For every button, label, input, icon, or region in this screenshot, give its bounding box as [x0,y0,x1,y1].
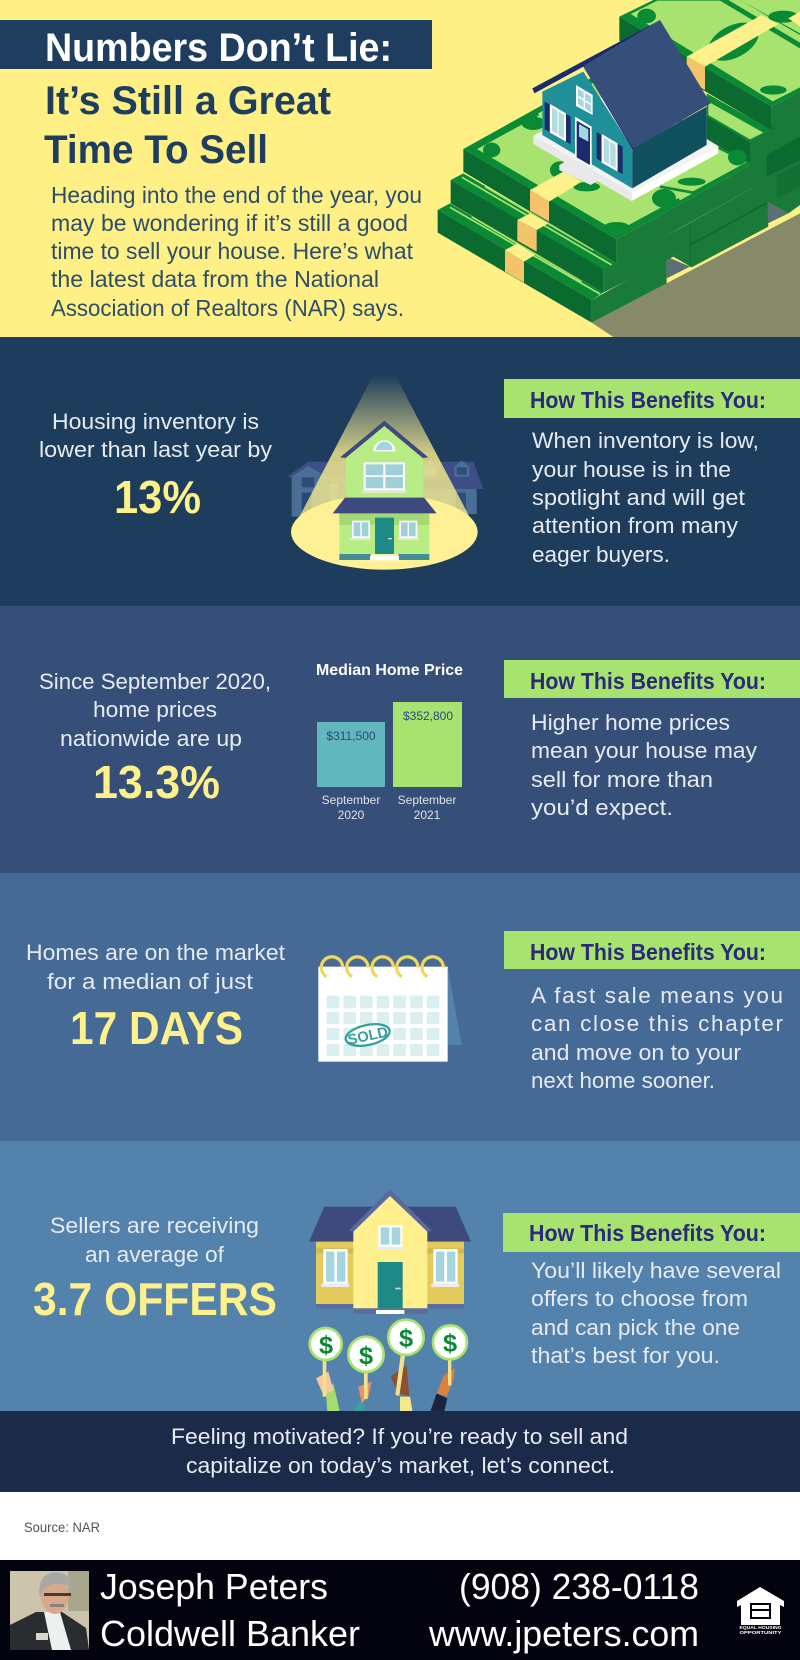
benefit text: A fast sale means you [531,983,783,1008]
icon: equal housing opportunity: EQUAL HOUSING [740,1625,782,1630]
stat: offers: Sellers are receiving [50,1213,259,1238]
benefit text: can close this chapter [531,1011,784,1036]
panel: header [0,0,800,337]
agent name [100,1566,360,1654]
stat: days on market [26,940,286,1054]
call to action: Feeling motivated? If you’re ready to sell and [171,1424,628,1449]
benefit text: and can pick the one [531,1315,740,1340]
stat: housing inventory: 13% [114,471,201,523]
icon: calendar with sold stamp: SOLD [346,1025,390,1049]
benefit banner: How This Benefits You: [529,1220,766,1246]
stat: housing inventory [39,409,273,523]
benefit text [531,1258,781,1368]
icon: house with bidding hands: $ [359,1342,373,1370]
tier 1 [463,66,767,239]
house [533,87,718,193]
intro text: may be wondering if it’s still a good [51,210,408,236]
icon: house in spotlight [287,375,483,570]
contact details: (908) 238-0118 [459,1566,699,1607]
icon: calendar with sold stamp [318,957,462,1062]
intro text: the latest data from the National [51,266,379,292]
benefit banner: How This Benefits You: [530,668,766,694]
bar chart: median home price: 2021 [414,808,441,822]
benefit text: that’s best for you. [531,1343,720,1368]
benefit text: When inventory is low, [532,428,759,453]
panel: home price band [0,606,800,873]
stat: home prices [39,669,271,808]
benefit text: next home sooner. [531,1068,715,1093]
benefit banner: How This Benefits You: [530,939,766,965]
stat: days on market: for a median of just [47,969,254,994]
stat: housing inventory: lower than last year by [39,437,273,462]
bar chart: median home price: $352,800 [403,709,453,723]
benefit banner [504,660,800,698]
icon: house with bidding hands: $ [399,1325,413,1353]
agent name: Coldwell Banker [100,1613,360,1654]
contact details: www.jpeters.com [428,1613,699,1654]
panel: inventory band [0,337,800,606]
stat: home prices: Since September 2020, [39,669,271,694]
icon: house with bidding hands: $ [319,1331,333,1359]
agent photo [10,1571,89,1650]
benefit text: You’ll likely have several [531,1258,781,1283]
panel: offers band [0,1141,800,1412]
tier 2 [451,173,617,270]
bar chart: median home price: September [398,793,456,807]
source note [0,1492,800,1560]
bar chart: median home price: $311,500 [326,729,376,743]
benefit text: mean your house may [531,738,758,763]
icon: house with bidding hands [309,1189,471,1412]
benefit text [532,428,759,567]
benefit text: sell for more than [531,767,713,792]
title subheading: It’s Still a Great [45,79,331,123]
stat: days on market: Homes are on the market [26,940,286,965]
intro text: Heading into the end of the year, you [51,182,422,208]
benefit text: offers to choose from [531,1286,748,1311]
stat: housing inventory: Housing inventory is [52,409,259,434]
title banner: Numbers Don’t Lie: [45,26,392,70]
benefit text: eager buyers. [532,542,670,567]
intro text: time to sell your house. Here’s what [51,238,414,264]
benefit banner [504,931,800,969]
stat: offers: an average of [85,1242,225,1267]
call to action: capitalize on today’s market, let’s connect. [186,1453,615,1478]
call to action [0,1411,800,1492]
benefit text [531,983,784,1093]
benefit text [531,710,758,820]
panel: days on market band [0,873,800,1141]
stat: offers [33,1213,277,1325]
illustration: house on stacks of money [438,0,800,337]
benefit text: attention from many [532,513,739,538]
icon: house with bidding hands: $ [443,1330,457,1358]
benefit text: spotlight and will get [532,485,746,510]
bar chart: median home price [316,662,463,822]
title subheading [44,79,331,172]
benefit banner [504,379,800,418]
sign handles and arms [316,1355,455,1412]
bands [530,172,582,202]
tier 3 [438,203,603,300]
stat: days on market: 17 DAYS [70,1002,243,1054]
contact details [428,1566,699,1654]
stat: home prices: home prices [93,697,217,722]
stat: home prices: 13.3% [93,756,220,808]
bar chart: median home price: Median Home Price [316,662,463,679]
benefit text: and move on to your [531,1040,742,1065]
intro text [51,182,422,321]
benefit banner [503,1213,800,1252]
stat: offers: 3.7 OFFERS [33,1273,277,1325]
bar chart: median home price: 2020 [338,808,365,822]
intro text: Association of Realtors (NAR) says. [51,295,404,321]
agent footer [0,1560,800,1660]
title subheading: Time To Sell [44,128,268,172]
icon: equal housing opportunity [737,1587,784,1635]
icon: equal housing opportunity: OPPORTUNITY [740,1630,782,1635]
benefit text: your house is in the [532,457,731,482]
agent name: Joseph Peters [100,1566,328,1607]
benefit text: you’d expect. [531,795,673,820]
bar chart: median home price: September [322,793,380,807]
benefit text: Higher home prices [531,710,730,735]
benefit banner: How This Benefits You: [530,387,766,413]
stat: home prices: nationwide are up [60,726,242,751]
source note: Source: NAR [24,1520,100,1535]
